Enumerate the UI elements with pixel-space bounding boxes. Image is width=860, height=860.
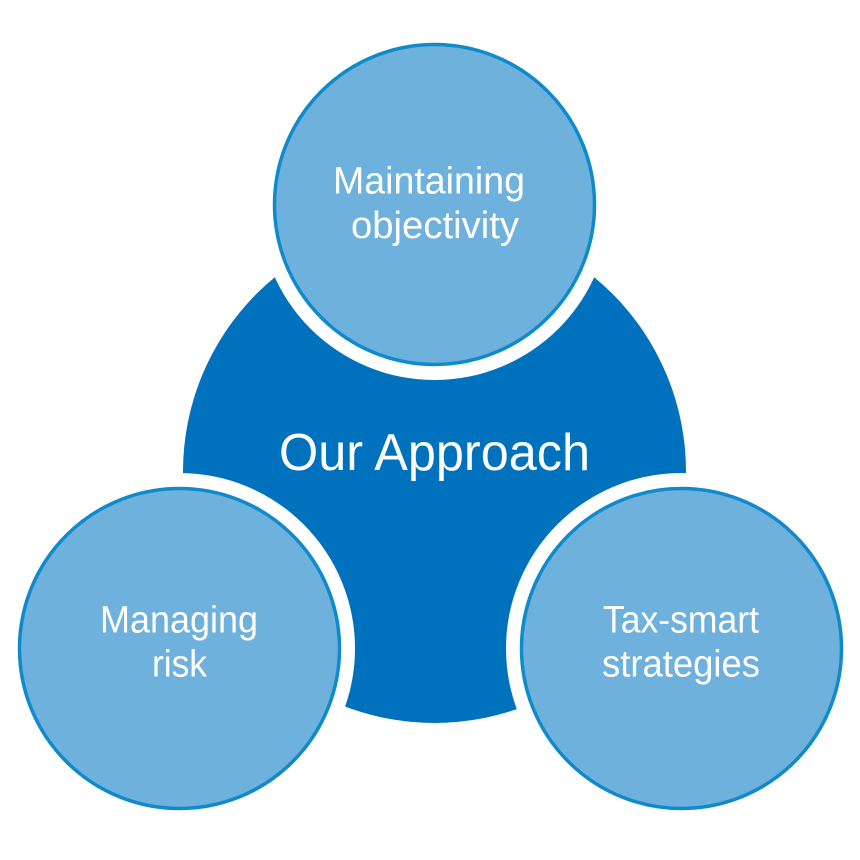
text: Maintaining objectivity: objectivity	[351, 205, 519, 247]
panel: Tax-smart strategies	[522, 488, 842, 808]
text: Maintaining objectivity	[333, 160, 525, 247]
panel: Managing risk	[20, 488, 340, 808]
text: Managing risk: Managing	[100, 600, 258, 642]
text: Managing risk: risk	[152, 644, 208, 686]
text: Tax-smart strategies	[602, 600, 760, 686]
heading: Our Approach: Our Approach	[279, 424, 590, 482]
text: Tax-smart strategies: strategies	[602, 644, 760, 686]
text: Managing risk	[100, 600, 258, 686]
text: Tax-smart strategies: Tax-smart	[603, 600, 759, 642]
text: Maintaining objectivity: Maintaining	[333, 160, 525, 202]
panel: Maintaining objectivity	[274, 44, 594, 364]
